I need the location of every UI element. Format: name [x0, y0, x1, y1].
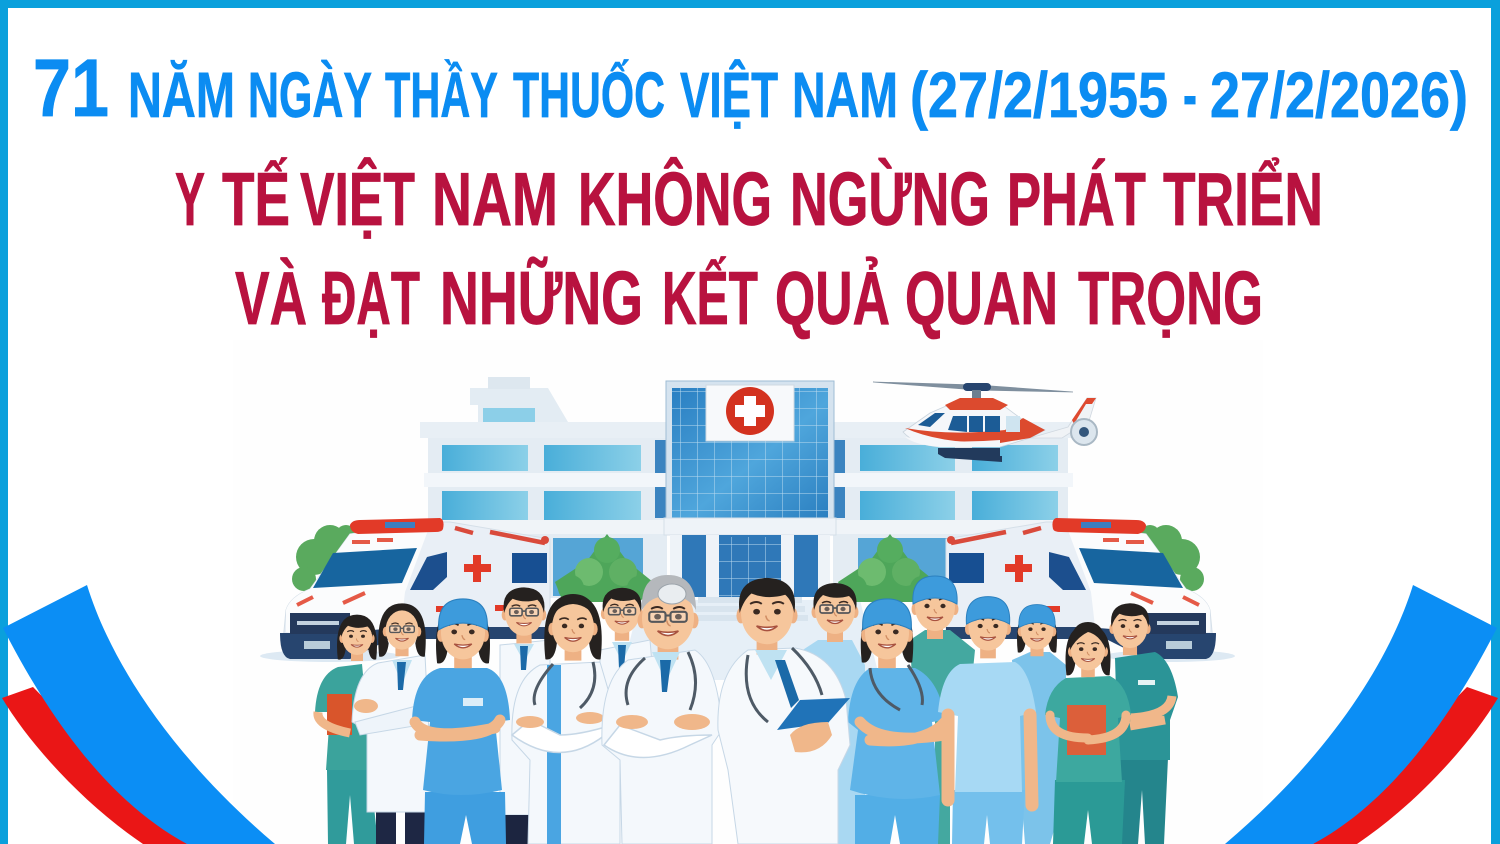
- heading: main message: [175, 157, 1323, 340]
- illustration: hospital scene: [233, 340, 1263, 844]
- heading: main message: KHÔNG: [578, 157, 772, 241]
- back nurse blue: [1012, 605, 1066, 844]
- hospital building: [260, 377, 1235, 680]
- heading: main message: ĐẠT: [322, 256, 420, 340]
- senior doctor with head mirror: [602, 575, 722, 844]
- left ambulance: [280, 518, 550, 659]
- team of medical staff: [315, 575, 1178, 844]
- doctor woman in white coat: [352, 603, 433, 844]
- heading: main message: VÀ: [235, 256, 307, 340]
- title: anniversary line: NĂM: [128, 59, 235, 131]
- title: anniversary line: 71: [33, 43, 109, 134]
- helicopter: [873, 382, 1097, 462]
- heading: main message: NHỮNG: [440, 256, 643, 340]
- heading: main message: VIỆT: [300, 157, 415, 241]
- title: anniversary line: (27/2/1955: [910, 59, 1168, 131]
- title: anniversary line: THẦY: [385, 59, 498, 131]
- heading: main message: NGỪNG: [790, 157, 990, 241]
- nurse in teal with folder: [315, 615, 378, 844]
- ribbon: right blue: [1225, 585, 1497, 844]
- heading: main message: NAM: [432, 157, 558, 241]
- title: anniversary line: THUỐC: [513, 59, 665, 131]
- ribbon: left blue: [3, 585, 275, 844]
- heading: main message: QUẢ: [775, 256, 890, 340]
- heading: main message: TRIỂN: [1163, 157, 1323, 241]
- woman doctor with stethoscope: [512, 594, 620, 844]
- heading: main message: TẾ: [222, 157, 290, 241]
- penthouse: [470, 377, 568, 422]
- heading: main message: TRỌNG: [1078, 256, 1263, 340]
- hospital sign: [706, 385, 794, 441]
- nurse in teal with red folder: [1045, 622, 1131, 844]
- back man glasses centre: [600, 588, 655, 700]
- heading: main message: PHÁT: [1007, 157, 1146, 241]
- nurse in blue with stethoscope: [848, 599, 945, 844]
- title: anniversary line: VIỆT: [680, 58, 778, 131]
- male nurse pale blue: [938, 597, 1036, 844]
- title: anniversary line: -: [1183, 59, 1197, 131]
- title: anniversary line: [33, 43, 1468, 134]
- central glass tower: [666, 381, 834, 520]
- heading: main message: Y: [175, 157, 205, 241]
- lead doctor with clipboard: [718, 578, 850, 844]
- nurse in man teal scrubs: [1109, 603, 1178, 844]
- back man glasses: [500, 587, 550, 844]
- back man pale scrubs: [795, 583, 865, 844]
- ribbon: left red: [2, 687, 187, 844]
- trees: [555, 534, 936, 602]
- title: anniversary line: NAM: [792, 59, 898, 131]
- heading: main message: KẾT: [662, 256, 758, 340]
- ribbon: right red: [1313, 687, 1498, 844]
- back man teal scrubs: [910, 576, 975, 844]
- title: anniversary line: NGÀY: [248, 59, 372, 131]
- heading: main message: QUAN: [905, 256, 1058, 340]
- blue nurse with cap: [412, 599, 510, 844]
- right ambulance: [946, 518, 1216, 659]
